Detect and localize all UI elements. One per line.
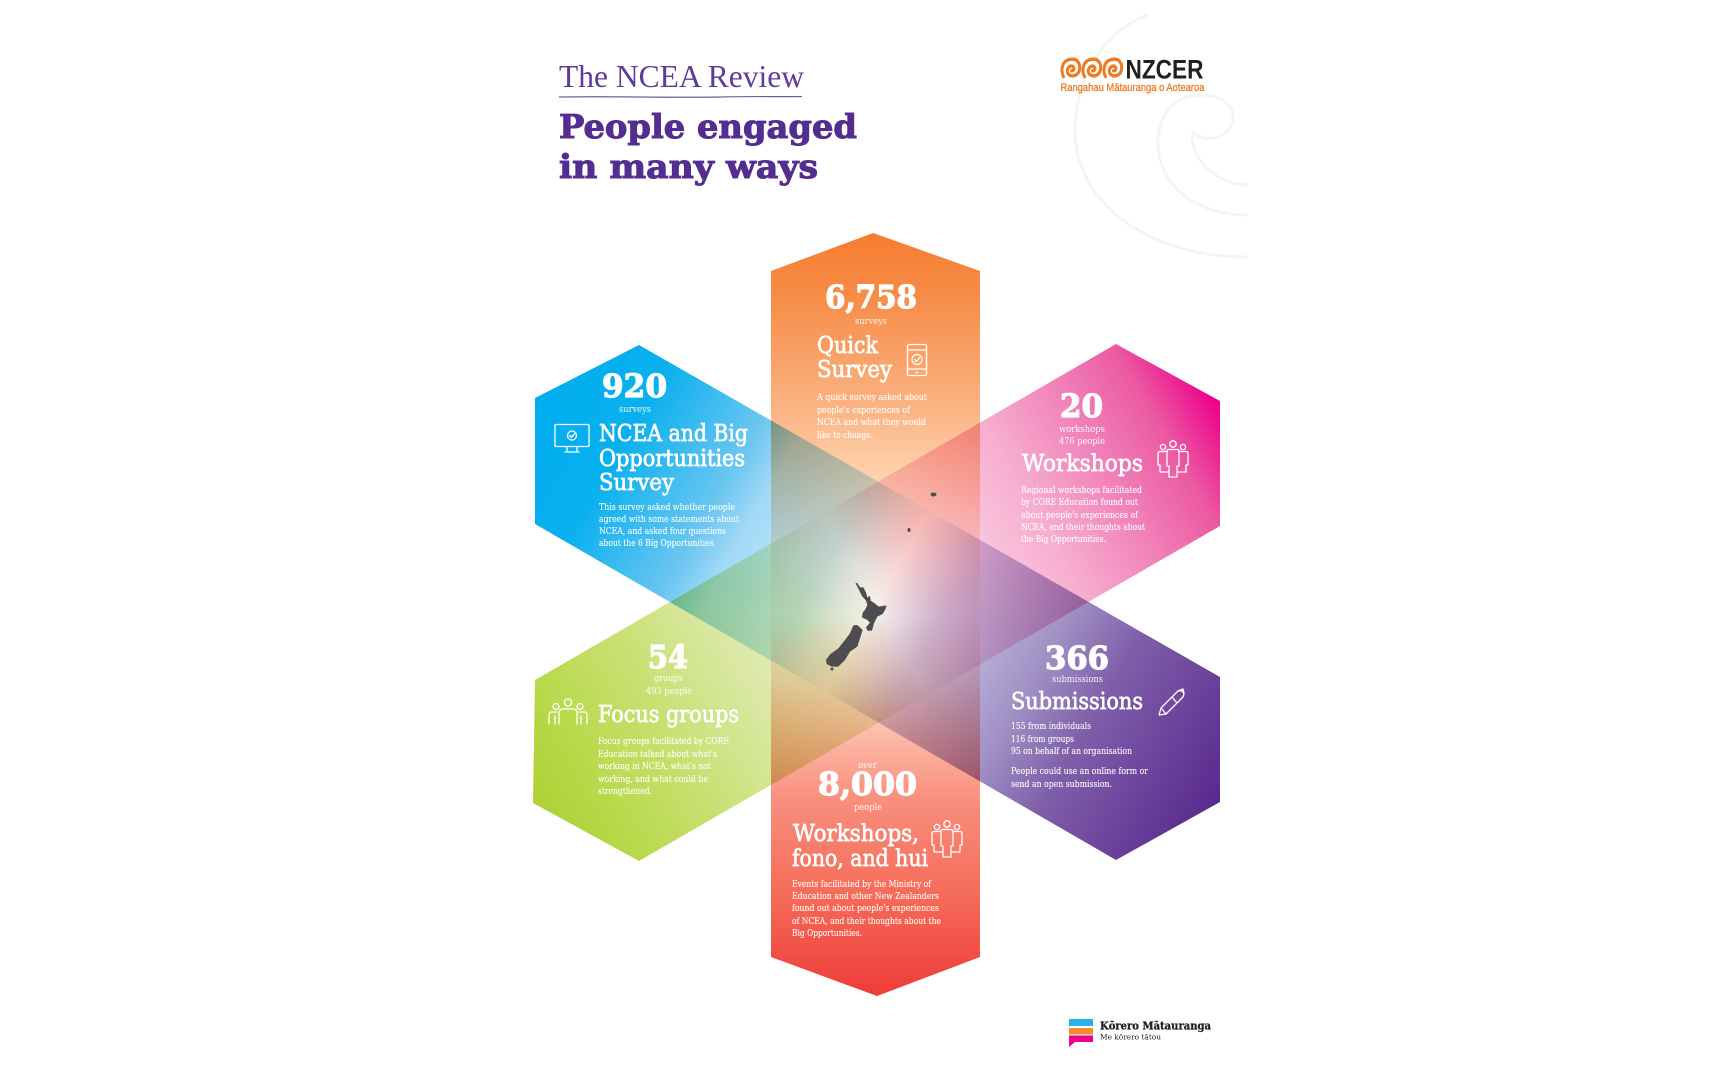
heading: Submissions <box>1011 689 1143 715</box>
heading line 1: NCEA and Big <box>599 421 748 447</box>
description: Focus groups facilitated by CORE <box>598 737 729 747</box>
stat: 920 surveys: 920 <box>602 367 667 405</box>
heading line 2: Opportunities <box>599 446 745 472</box>
subtitle: The NCEA Review: The NCEA Review <box>559 58 804 94</box>
hexagon band: blue to purple <box>535 345 1220 860</box>
Kōrero Mātauranga logo <box>1069 1019 1211 1047</box>
description: about the 6 Big Opportunities. <box>599 539 716 549</box>
South Island <box>826 625 863 667</box>
description: working, and what could be <box>598 775 708 785</box>
description: 155 from individuals <box>1011 722 1091 732</box>
stat unit: people: 493 people <box>646 687 692 697</box>
panel: Submissions <box>1011 639 1184 790</box>
hexagon band: pink to green <box>533 344 1220 861</box>
stat unit: surveys <box>855 317 887 327</box>
description <box>1011 722 1149 790</box>
heading line 2: Survey <box>817 357 892 383</box>
description: strengthened. <box>598 787 652 797</box>
description: 95 on behalf of an organisation <box>1011 747 1132 757</box>
description: People could use an online form or <box>1011 767 1149 777</box>
heading: Focus groups <box>598 702 739 728</box>
description: like to change. <box>817 431 873 441</box>
description: 116 from groups <box>1011 735 1074 745</box>
description: NCEA, and their thoughts about <box>1021 523 1145 533</box>
stat unit: groups: groups <box>654 674 683 684</box>
panel: Workshops, fono, and hui <box>792 761 962 939</box>
title block <box>559 58 857 186</box>
panel: Workshops <box>1021 387 1188 545</box>
description: working in NCEA, what's not <box>598 762 711 772</box>
stat: 20 workshops: 20 <box>1060 387 1103 425</box>
stat unit: people <box>854 803 882 813</box>
stat unit: people: 476 people <box>1059 437 1105 447</box>
description: A quick survey asked about <box>816 393 927 403</box>
panel: Quick Survey <box>816 278 927 441</box>
decorative koru watermark <box>1075 15 1248 257</box>
Chatham-side islet, upper <box>930 492 936 496</box>
panel: Focus groups <box>549 638 739 797</box>
description <box>598 737 729 797</box>
hexagon band: orange to red <box>771 233 980 996</box>
map of New Zealand <box>826 492 936 670</box>
main heading line 1: People engaged <box>559 107 857 146</box>
description: the Big Opportunities. <box>1021 535 1106 545</box>
icon: pen <box>1159 689 1184 715</box>
heading line 2: fono, and hui <box>792 846 928 872</box>
heading line 1: Quick <box>817 333 879 359</box>
heading line 3: Survey <box>599 470 674 496</box>
description: NCEA, and asked four questions <box>599 527 726 537</box>
stat: 54 groups: 54 <box>648 638 688 676</box>
description: agreed with some statements about <box>599 515 739 525</box>
stat unit: submissions <box>1052 675 1103 685</box>
islet, lower <box>908 528 910 532</box>
stat: 366 submissions: 366 <box>1045 639 1109 677</box>
description: Events facilitated by the Ministry of <box>792 880 932 890</box>
icon: phone with tick <box>908 344 926 376</box>
logo wordmark: Kōrero Mātauranga <box>1100 1020 1211 1032</box>
NZCER logo <box>1060 54 1204 94</box>
description: people's experiences of <box>817 406 911 416</box>
stat: 6,758 surveys: 6,758 <box>825 278 917 316</box>
North Island <box>855 583 887 631</box>
description: by CORE Education found out <box>1021 498 1138 508</box>
description: NCEA and what they would <box>817 418 926 428</box>
heading: Workshops <box>1022 451 1143 477</box>
Stewart Island <box>830 668 834 670</box>
icon: three koru swirls <box>1062 59 1122 77</box>
description: Big Opportunities. <box>792 929 862 939</box>
panel: NCEA and Big Opportunities Survey <box>555 367 748 549</box>
logo tagline: Me kōrero tātou <box>1100 1032 1161 1042</box>
icon: group of people <box>549 699 587 724</box>
icon: three people <box>932 821 962 857</box>
subtitle underline <box>559 96 802 98</box>
description <box>816 393 927 441</box>
stat unit: workshops: workshops <box>1059 425 1105 435</box>
stat prefix: over <box>858 761 878 771</box>
logo wordmark: NZCER <box>1126 54 1204 84</box>
icon: speech bubble stripes <box>1069 1019 1093 1047</box>
description: Regional workshops facilitated <box>1021 486 1142 496</box>
description: This survey asked whether people <box>599 503 735 513</box>
stat: 8,000 people: 8,000 <box>818 765 917 803</box>
description <box>1021 486 1145 545</box>
heading line 1: Workshops, <box>793 821 919 847</box>
description <box>599 503 739 549</box>
stat unit: surveys <box>619 405 651 415</box>
description: of NCEA, and their thoughts about the <box>792 917 941 927</box>
logo tagline: Rangahau Mātauranga o Aotearoa <box>1060 82 1204 94</box>
description: found out about people's experiences <box>792 904 939 914</box>
description: Education talked about what's <box>598 750 717 760</box>
description <box>792 880 941 939</box>
icon: three people <box>1158 441 1188 477</box>
main heading line 2: in many ways <box>559 147 818 186</box>
description: about people's experiences of <box>1021 511 1139 521</box>
description: Education and other New Zealanders <box>792 892 939 902</box>
description: send an open submission. <box>1011 780 1112 790</box>
icon: monitor with tick <box>555 424 589 452</box>
